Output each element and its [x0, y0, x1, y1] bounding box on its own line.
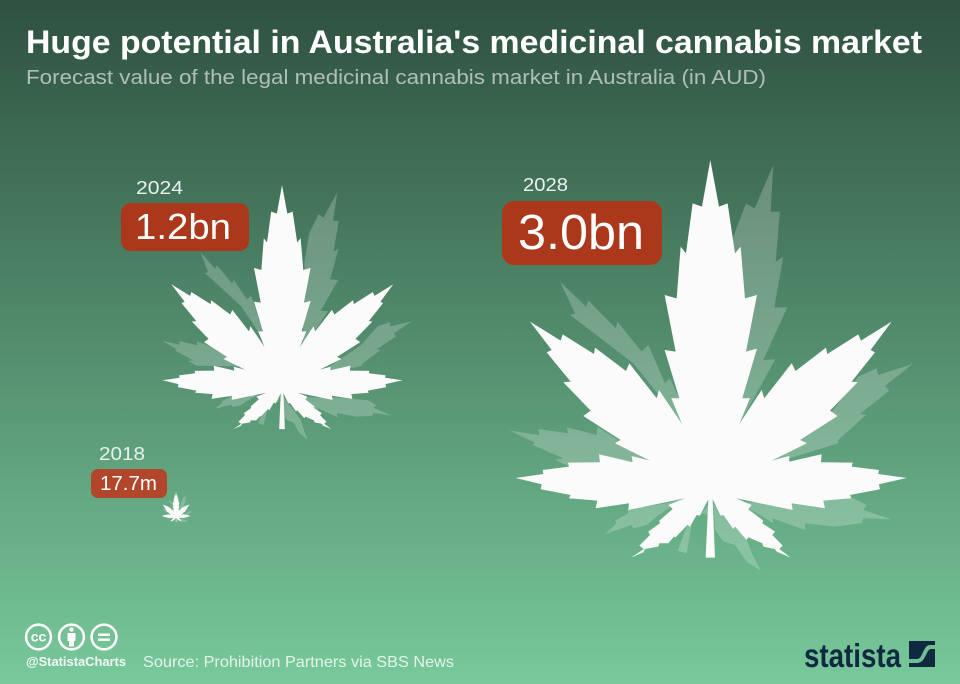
icon: creative commons: cc: [31, 628, 46, 644]
icon: leaf 2024: [155, 178, 422, 448]
label: 2024: [121, 178, 249, 251]
label: 2018: 17.7m: [100, 473, 157, 495]
label: 2028: 3.0bn: [518, 206, 644, 260]
source: Source: Prohibition Partners via SBS News: [143, 654, 454, 671]
label: 2028: [502, 175, 662, 265]
icon: leaf 2028: [510, 160, 913, 571]
logo: statista: statista: [804, 637, 902, 674]
title: Huge potential in Australia's medicinal cannabis market: [26, 24, 922, 60]
icon: leaf 2018: [160, 489, 197, 527]
label: 2028: 2028: [523, 175, 568, 195]
handle: @StatistaCharts: [26, 655, 126, 669]
icon: creative commons: [26, 625, 116, 649]
label: 2018: 2018: [99, 444, 145, 464]
label: 2018: [91, 444, 167, 498]
label: 2024: 1.2bn: [135, 206, 231, 247]
label: 2024: 2024: [136, 178, 183, 198]
subtitle: Forecast value of the legal medicinal cannabis market in Australia (in AUD): [26, 67, 766, 89]
